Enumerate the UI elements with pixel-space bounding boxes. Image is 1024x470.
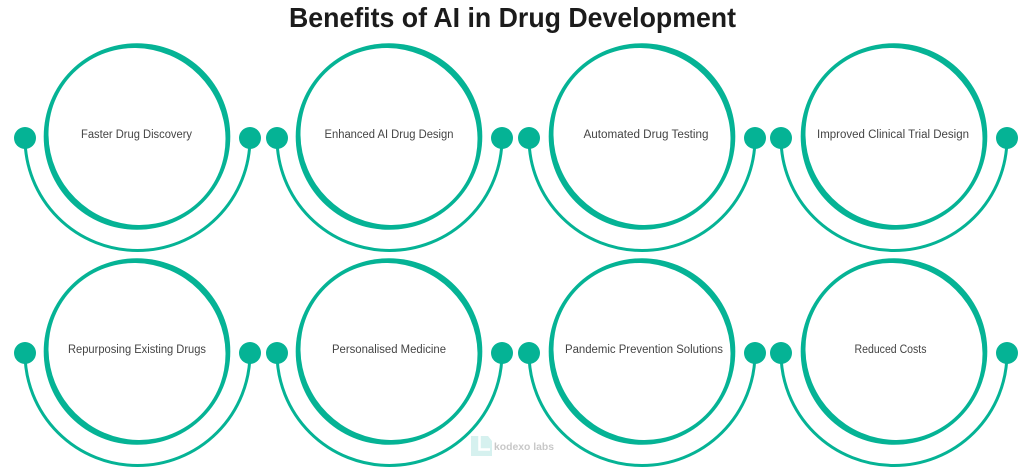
item: Automated Drug Testing (517, 11, 767, 262)
item: Reduced Costs: Reduced Costs (854, 344, 927, 356)
item: Enhanced AI Drug Design (264, 11, 514, 262)
title: Benefits of AI in Drug Development (289, 2, 736, 33)
item: Improved Clinical Trial Design (769, 11, 1019, 262)
item: Repurposing Existing Drugs (12, 226, 262, 470)
item: Improved Clinical Trial Design: Improved Clinical Trial Design (817, 129, 969, 141)
item: Repurposing Existing Drugs: Repurposing Existing Drugs (68, 344, 206, 356)
item: Personalised Medicine: Personalised Medicine (332, 344, 446, 356)
item: Faster Drug Discovery (12, 11, 262, 262)
item: Pandemic Prevention Solutions (517, 226, 767, 470)
item: Faster Drug Discovery: Faster Drug Discovery (81, 129, 192, 141)
logo: kodexo labs (471, 436, 554, 456)
item: Personalised Medicine (264, 226, 514, 470)
item: Automated Drug Testing: Automated Drug Testing (584, 129, 708, 141)
item: Pandemic Prevention Solutions: Pandemic Prevention Solutions (565, 344, 723, 356)
item: Reduced Costs (769, 226, 1019, 470)
item: Enhanced AI Drug Design: Enhanced AI Drug Design (324, 129, 454, 141)
logo: kodexo labs: kodexo labs (494, 441, 554, 453)
